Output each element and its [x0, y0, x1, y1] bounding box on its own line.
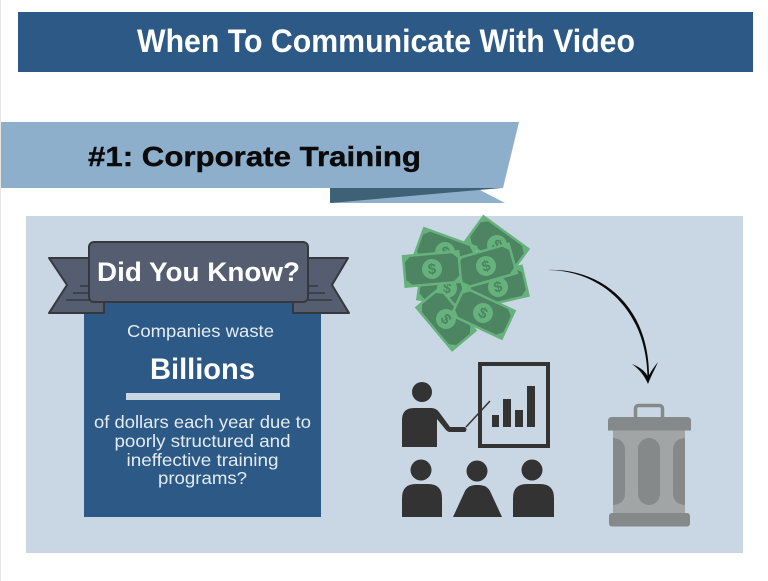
text panel: poorly structured and: [114, 431, 290, 451]
text panel: Billions: [150, 353, 255, 386]
text panel: programs?: [158, 468, 247, 488]
title bar: [18, 12, 753, 72]
icon: pile of money: [402, 215, 530, 352]
icon: pile of money: $: [492, 278, 505, 297]
audience: [402, 460, 554, 517]
icon: pile of money: $: [427, 261, 438, 278]
did you know card: [49, 242, 349, 517]
presentation board: [480, 364, 548, 446]
icon: pile of money: $: [475, 304, 491, 323]
icon: trash can: [608, 406, 691, 526]
text panel: [84, 300, 321, 517]
arrow to trash: [548, 270, 658, 384]
icon: pile of money: $: [438, 243, 452, 262]
text panel: of dollars each year due to: [94, 412, 311, 432]
text panel: ineffective training: [126, 450, 278, 470]
presenter: [402, 382, 490, 447]
ribbon tails: [49, 258, 349, 313]
icon: presenter and audience: [402, 364, 554, 517]
icon: pile of money: $: [488, 236, 506, 255]
panel background: [26, 216, 743, 553]
icon: pile of money: $: [480, 257, 493, 276]
section banner: corporate training: [1, 122, 519, 203]
ribbon badge: [89, 242, 308, 302]
section banner: corporate training: #1: Corporate Training: [88, 141, 421, 172]
text panel: Companies waste: [127, 321, 274, 341]
icon: pile of money: $: [442, 279, 453, 298]
icon: pile of money: $: [436, 311, 455, 328]
ribbon badge: Did You Know?: [97, 257, 300, 287]
title bar: When To Communicate With Video: [137, 23, 635, 59]
